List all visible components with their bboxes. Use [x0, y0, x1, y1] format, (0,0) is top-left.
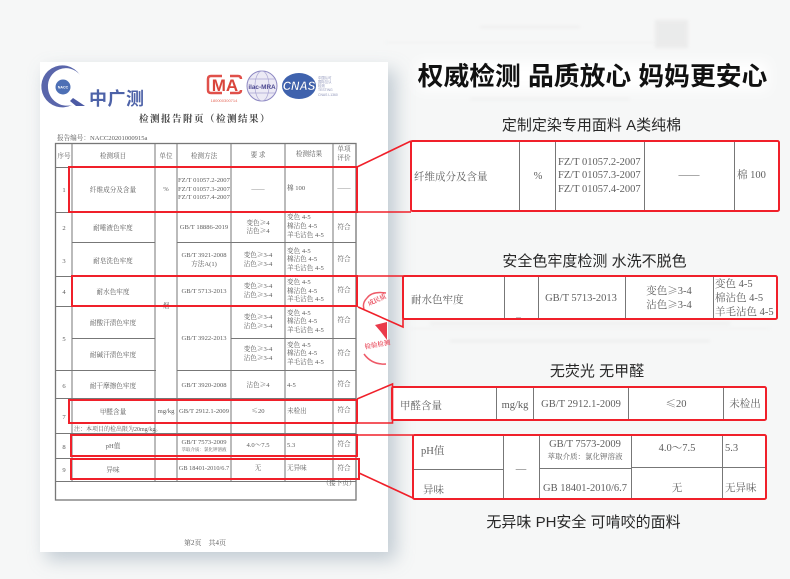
- report table: pH值: [106, 441, 121, 450]
- subheading 2: 安全色牢度检测 水洗不脱色: [502, 252, 687, 270]
- heading glow: [418, 62, 768, 90]
- report table: 要 求: [251, 150, 266, 159]
- report table: 沾色≥3-4: [244, 352, 273, 362]
- report table: 变色 4-5: [287, 212, 311, 221]
- report table: GB/T 3921-2008: [181, 252, 227, 259]
- report table: 检测结果: [296, 149, 323, 158]
- panel: pH and odour: 5.3: [725, 443, 738, 454]
- panel: formaldehyde: [392, 387, 766, 420]
- report table: 耐干摩擦色牢度: [90, 381, 136, 390]
- panel: fibre content: [411, 141, 779, 211]
- logo: NACC magnifier: [41, 65, 85, 107]
- panel: pH and odour: —: [515, 464, 527, 475]
- panel: fibre content: 纤维成分及含量: [414, 170, 488, 183]
- seal: [363, 291, 391, 364]
- panel: formaldehyde: 甲醛含量: [400, 399, 442, 412]
- report table: 评价: [337, 153, 351, 162]
- report table: 4.0～7.5: [246, 442, 270, 449]
- report table: [56, 144, 356, 500]
- report table: 沾色≥3-4: [244, 320, 273, 330]
- report table: FZ/T 01057.4-2007: [178, 194, 231, 201]
- report table: 变色 4-5: [287, 246, 311, 255]
- certification mark: ILAC-MRA: ilac-MRA: [248, 84, 276, 91]
- report table: 耐碱汗渍色牢度: [90, 350, 136, 359]
- report table: 符合: [337, 348, 351, 357]
- panel: water colour fastness: GB/T 5713-2013: [545, 293, 617, 304]
- report table: GB/T 3920-2008: [181, 382, 227, 389]
- report table: 1: [62, 187, 66, 194]
- report table: 甲醛含量: [100, 407, 127, 416]
- report table: 未检出: [287, 406, 307, 415]
- certification mark: CNAS: CNAS L1360: [318, 93, 338, 97]
- panel: pH and odour: pH值: [421, 444, 445, 457]
- panel: fibre content: FZ/T 01057.4-2007: [558, 184, 641, 195]
- certification mark: CNAS: 检测: [318, 83, 325, 88]
- report title: 检测报告附页（检测结果）: [139, 113, 271, 125]
- report table: 变色≥3-4: [244, 280, 273, 290]
- panel: test report page: [40, 62, 391, 552]
- report table: 棉沾色 4-5: [287, 348, 318, 357]
- report table: 符合: [337, 222, 351, 231]
- report table: 方法A(1): [191, 259, 217, 268]
- report table: GB/T 18886-2019: [180, 224, 229, 231]
- certification mark: CMA: [208, 76, 241, 103]
- report table: 烟: [163, 301, 170, 310]
- panel: pH and odour: [413, 435, 766, 499]
- panel: pH and odour: GB/T 7573-2009: [549, 439, 621, 450]
- certification mark: CMA: MA: [212, 76, 238, 95]
- panel: formaldehyde: ≤20: [666, 396, 686, 411]
- report table: 符合: [337, 285, 351, 294]
- report table: （接下页）: [323, 478, 355, 487]
- panel: water colour fastness: 耐水色牢度: [411, 293, 464, 306]
- report table: 6: [62, 383, 66, 390]
- report table: 棉沾色 4-5: [287, 316, 318, 325]
- report table: 羊毛沾色 4-5: [287, 263, 325, 272]
- report table: mg/kg: [158, 408, 175, 415]
- panel: water colour fastness: 棉沾色 4-5: [715, 291, 763, 304]
- certification mark: CNAS: TESTING: [318, 88, 333, 92]
- subheading 3: 无荧光 无甲醛: [550, 363, 644, 380]
- report table: 9: [62, 467, 66, 474]
- report table: 变色 4-5: [287, 308, 311, 317]
- report table: 棉 100: [287, 183, 306, 192]
- report table: 沾色≥4: [246, 225, 270, 235]
- seal: 成民质: [366, 291, 388, 308]
- report table: GB/T 2912.1-2009: [179, 408, 230, 415]
- report table: 耐水色牢度: [97, 287, 130, 296]
- certification mark: ILAC-MRA: [247, 71, 277, 101]
- report table: 沾色≥3-4: [244, 258, 273, 268]
- panel: pH and odour: 4.0～7.5: [659, 443, 695, 454]
- report table: 7: [62, 414, 66, 421]
- panel: water colour fastness: 羊毛沾色 4-5: [715, 305, 774, 318]
- report table: 纤维成分及含量: [90, 185, 136, 194]
- highlight boxes on report: [69, 167, 359, 479]
- panel: fibre content: 棉 100: [737, 168, 766, 181]
- report table: 单位: [159, 151, 173, 160]
- report table: ≤20: [251, 405, 265, 415]
- report table: 4: [62, 289, 66, 296]
- report table: 变色≥4: [246, 217, 270, 227]
- panel: pH and odour: 无: [672, 482, 683, 494]
- report table: 注：本项目的检出限为20mg/kg。: [74, 425, 161, 433]
- report table: 耐唾液色牢度: [93, 223, 133, 232]
- report table: 符合: [337, 439, 351, 448]
- report table: 羊毛沾色 4-5: [287, 230, 325, 239]
- report table: 耐皂洗色牢度: [93, 256, 133, 265]
- logo text: 中广测: [89, 89, 144, 109]
- report table: 单项: [337, 144, 351, 153]
- report table: 变色 4-5: [287, 340, 311, 349]
- paper shadow: [46, 70, 396, 560]
- panel: water colour fastness: 变色≥3-4: [646, 283, 692, 298]
- subheading 1: 定制定染专用面料 A类纯棉: [502, 117, 681, 134]
- panel: pH and odour: 异味: [423, 483, 444, 496]
- report table: 羊毛沾色 4-5: [287, 325, 325, 334]
- panel: pH and odour: 无异味: [725, 481, 757, 494]
- certification mark: CNAS: [282, 73, 338, 99]
- report table: ——: [336, 185, 351, 192]
- report table: 异味: [106, 465, 120, 474]
- report table: 沾色≥4: [246, 379, 270, 389]
- panel: water colour fastness: [403, 276, 777, 319]
- report table: 棉沾色 4-5: [287, 221, 318, 230]
- report table: 检测方法: [191, 151, 218, 160]
- panel: fibre content: FZ/T 01057.3-2007: [558, 170, 641, 181]
- report table: 5: [62, 336, 66, 343]
- report table: 4-5: [287, 382, 296, 389]
- report table: GB/T 5713-2013: [181, 288, 227, 295]
- seal: 检验检测: [364, 338, 391, 351]
- report table: 变色≥3-4: [244, 311, 273, 321]
- certification mark: CNAS: CNAS: [283, 81, 316, 93]
- certification mark: CNAS: 国际互认: [318, 79, 332, 84]
- subheading 4: 无异味 PH安全 可啃咬的面料: [486, 513, 681, 531]
- connector lines: [69, 141, 413, 498]
- report table: 无异味: [287, 463, 307, 472]
- report table: 萃取介质：氯化钾溶液: [182, 446, 227, 453]
- report table: 检测项目: [100, 151, 126, 160]
- report table: 符合: [337, 405, 351, 414]
- certification mark: CNAS: 中国认可: [318, 75, 332, 80]
- report table: 符合: [337, 379, 351, 388]
- report table: FZ/T 01057.2-2007: [178, 177, 231, 184]
- report table: 序号: [57, 151, 71, 160]
- logo: NACC magnifier: NACC: [58, 86, 69, 90]
- panel: pH and odour: GB 18401-2010/6.7: [543, 483, 627, 494]
- report table: GB/T 3922-2013: [181, 335, 227, 342]
- panel: fibre content: %: [534, 171, 543, 182]
- report table: 耐酸汗渍色牢度: [90, 318, 136, 327]
- report table: FZ/T 01057.3-2007: [178, 186, 231, 193]
- panel: formaldehyde: 未检出: [729, 397, 761, 410]
- panel: water colour fastness: 变色 4-5: [715, 277, 753, 290]
- panel: formaldehyde: mg/kg: [502, 400, 529, 411]
- report table: 棉沾色 4-5: [287, 254, 318, 263]
- report table: 符合: [337, 315, 351, 324]
- panel: fibre content: ——: [678, 170, 700, 181]
- panel: fibre content: FZ/T 01057.2-2007: [558, 157, 641, 168]
- report table: 变色≥3-4: [244, 249, 273, 259]
- report table: 沾色≥3-4: [244, 289, 273, 299]
- report table: 变色≥3-4: [244, 343, 273, 353]
- report table: 3: [62, 258, 66, 265]
- panel: water colour fastness: 沾色≥3-4: [646, 297, 692, 312]
- report table: ——: [250, 186, 265, 193]
- report table: %: [163, 186, 169, 193]
- report table: 棉沾色 4-5: [287, 286, 318, 295]
- page number: 第2页 共4页: [184, 538, 226, 547]
- blurred background report: [385, 20, 770, 342]
- heading: 权威检测 品质放心 妈妈更安心: [418, 62, 768, 91]
- report table: 2: [62, 225, 66, 232]
- report table: 羊毛沾色 4-5: [287, 294, 325, 303]
- report number: 报告编号：NACC20201000915a: [57, 133, 148, 142]
- report table: GB 18401-2010/6.7: [179, 465, 229, 472]
- report table: GB/T 7573-2009: [181, 439, 227, 446]
- report table: 羊毛沾色 4-5: [287, 357, 325, 366]
- panel: pH and odour: 萃取介质：氯化钾溶液: [548, 451, 623, 461]
- report table: 符合: [337, 463, 351, 472]
- report table: 变色 4-5: [287, 277, 311, 286]
- certification mark: CMA: 180000300714: [211, 98, 238, 103]
- report table: 无: [255, 464, 262, 472]
- report table: 8: [62, 444, 66, 451]
- report table: 符合: [337, 254, 351, 263]
- report table: 5.3: [287, 442, 296, 449]
- panel: formaldehyde: GB/T 2912.1-2009: [541, 399, 621, 410]
